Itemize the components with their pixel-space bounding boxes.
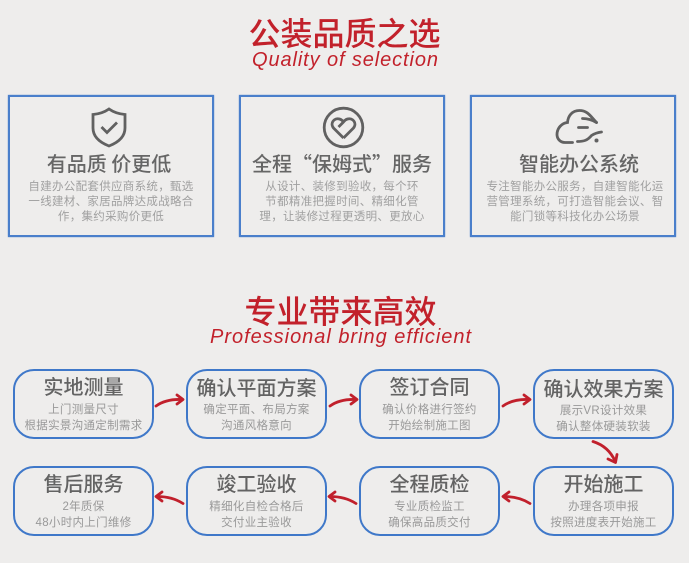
step description: 48小时内上门维修	[36, 516, 132, 528]
step: quality inspection	[359, 466, 500, 536]
panel description: 一线建材、家居品牌达成战略合	[28, 196, 194, 208]
step description	[36, 500, 132, 528]
panel description	[486, 180, 664, 223]
panel heading: 智能办公系统	[519, 154, 639, 176]
panel description: 营管理系统，可打造智能会议、智	[486, 196, 664, 208]
panel: better quality lower price	[8, 95, 214, 237]
panel description	[28, 180, 194, 223]
panel description: 专注智能办公服务，自建智能化运	[486, 181, 664, 193]
panel description: 作，集约采购价更低	[58, 211, 164, 223]
step description: 沟通风格意向	[221, 420, 292, 432]
step description: 根据实景沟通定制需求	[24, 420, 142, 432]
step: on-site measurement	[13, 369, 154, 439]
arrow: step 2 to 3	[330, 395, 357, 406]
step heading: 确认平面方案	[196, 378, 316, 400]
step description: 2年质保	[62, 500, 105, 512]
step heading: 确认效果方案	[544, 379, 664, 401]
subtitle: quality of selection: Quality of selection	[252, 49, 438, 71]
step description: 确认整体硬装软装	[556, 420, 651, 432]
icon: shield with check	[92, 107, 126, 148]
panel description: 能门锁等科技化办公场景	[510, 211, 640, 223]
icon: heart in circle	[322, 106, 364, 148]
step heading: 售后服务	[44, 474, 124, 496]
step description: 专业质检监工	[394, 500, 465, 512]
step heading: 开始施工	[564, 474, 644, 496]
step description: 确定平面、布局方案	[203, 404, 310, 416]
step description	[388, 500, 471, 528]
step description: 交付业主验收	[221, 516, 292, 528]
step description	[556, 404, 651, 432]
step description	[209, 500, 304, 528]
step: sign contract	[359, 369, 500, 439]
arrow: step 6 to 7	[329, 492, 356, 504]
panel description: 自建办公配套供应商系统，甄选	[28, 181, 194, 193]
panel description: 从设计、装修到验收，每个环	[265, 181, 419, 193]
panel: full nanny service	[239, 95, 445, 237]
arrow: step 7 to 8	[156, 492, 183, 504]
title: professional efficiency: 专业带来高效	[244, 294, 436, 330]
panel heading: 有品质 价更低	[47, 154, 171, 176]
step description: 确保高品质交付	[388, 516, 471, 528]
step description	[203, 403, 310, 432]
panel heading: 全程 保姆式 服务	[252, 154, 432, 176]
step heading: 实地测量	[44, 376, 124, 398]
step: after-sales service	[13, 466, 154, 536]
subtitle: professional efficiency: Professional bring efficient	[210, 326, 472, 348]
arrow: step 5 to 6	[503, 492, 530, 504]
step: confirm rendering plan	[533, 369, 674, 439]
step description: 按照进度表开始施工	[550, 516, 657, 528]
step description: 确认价格进行签约	[382, 404, 477, 416]
step description	[24, 403, 142, 432]
panel: smart office system	[470, 95, 676, 237]
step heading: 竣工验收	[216, 474, 296, 496]
panel heading: “	[292, 148, 312, 177]
step: confirm floor plan	[186, 369, 327, 439]
step description	[382, 403, 477, 432]
panel description: 节都精准把握时间、精细化管	[265, 196, 419, 208]
step description: 展示VR设计效果	[560, 404, 647, 416]
arrow: step 4 to 5	[593, 442, 617, 462]
arrow: step 1 to 2	[156, 395, 183, 406]
step description: 开始绘制施工图	[388, 420, 471, 432]
step description	[550, 500, 657, 528]
panel description	[259, 180, 425, 223]
arrow: step 3 to 4	[503, 395, 530, 406]
panel description: 理，让装修过程更透明、更放心	[259, 211, 425, 223]
step description: 精细化自检合格后	[209, 500, 304, 512]
panel heading: ”	[372, 148, 392, 177]
icon: cloud with wind lines	[556, 109, 603, 144]
step heading: 签订合同	[390, 377, 470, 399]
title: quality of selection: 公装品质之选	[248, 16, 440, 52]
step description: 办理各项申报	[568, 500, 639, 512]
step: start construction	[533, 466, 674, 536]
step: completion acceptance	[186, 466, 327, 536]
step heading: 全程质检	[390, 474, 470, 496]
step description: 上门测量尺寸	[48, 404, 119, 416]
